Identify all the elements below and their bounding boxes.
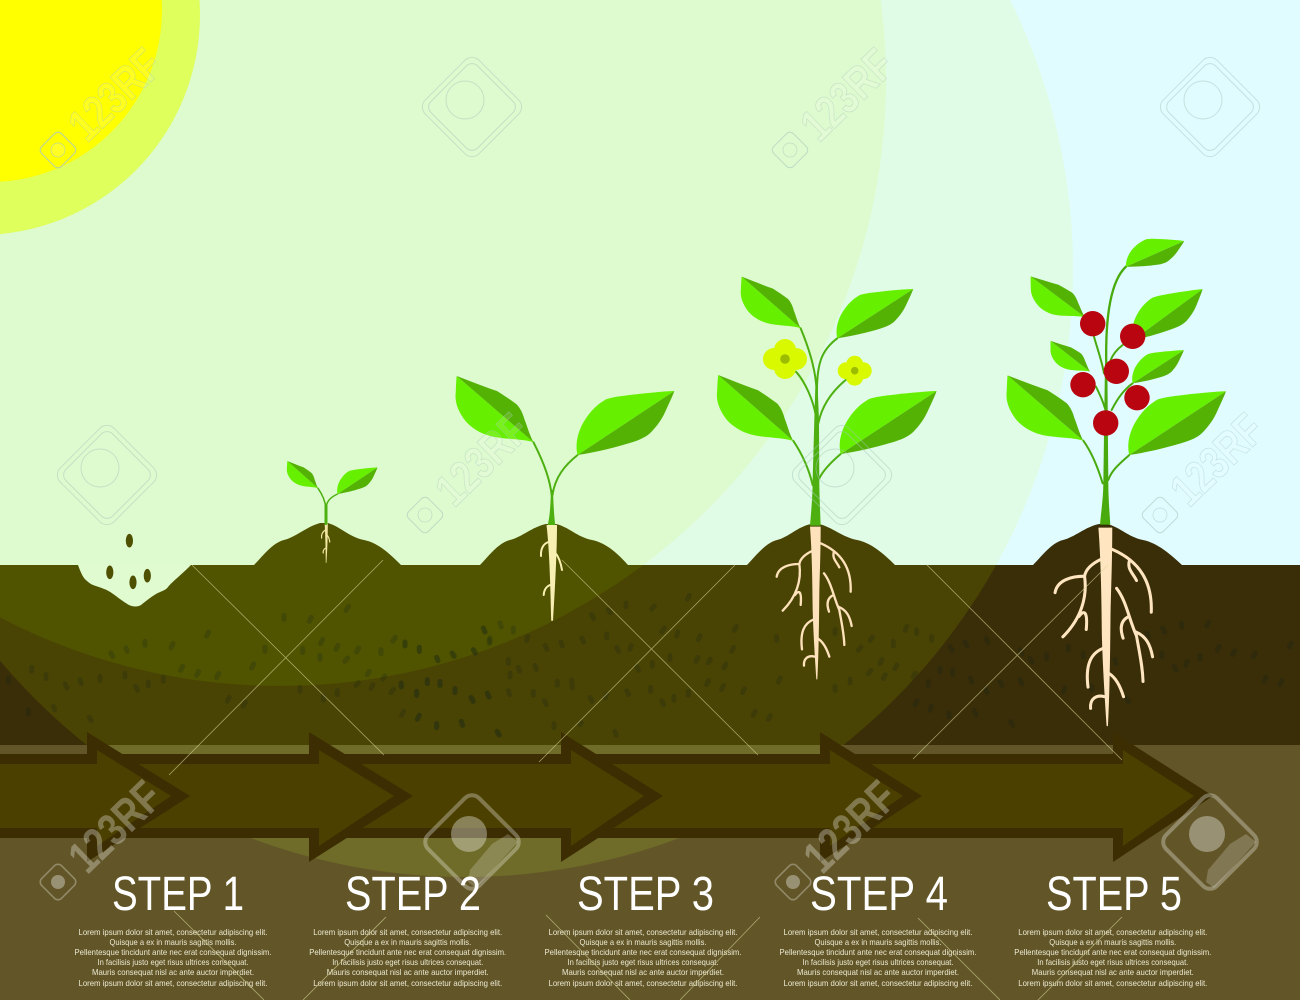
egg watermark bottom centre — [421, 791, 523, 893]
step 2: seedling — [254, 456, 401, 565]
step 4 body text — [780, 927, 976, 988]
step 4 body text: In facilisis justo eget risus ultrices consequat. — [802, 957, 954, 967]
sun — [0, 0, 200, 235]
step 1 body text: Pellentesque tincidunt ante nec erat consequat dignissim. — [74, 947, 272, 957]
arrow 5 — [0, 732, 1213, 862]
step 2 body text: Pellentesque tincidunt ante nec erat consequat dignissim. — [309, 947, 506, 957]
logo middle centre: 123RF — [425, 403, 539, 516]
step 2 body text: In facilisis justo eget risus ultrices consequat. — [332, 957, 483, 967]
step 4 caption — [780, 868, 976, 988]
step 1 body text: Mauris consequat nisl ac ante auctor imperdiet. — [92, 967, 254, 977]
logo top centre right: 123RF — [790, 38, 904, 151]
step 3 body text: Mauris consequat nisl ac ante auctor imperdiet. — [562, 967, 724, 977]
step 5 body text: Quisque a ex in mauris sagittis mollis. — [1049, 937, 1176, 947]
step 3 body text: Lorem ipsum dolor sit amet, consectetur adipiscing elit. — [548, 978, 738, 988]
logo top left: 123RF — [58, 38, 172, 151]
icon: small flower — [838, 356, 872, 386]
step 5 body text: Pellentesque tincidunt ante nec erat consequat dignissim. — [1014, 947, 1211, 957]
step 4 body text: Mauris consequat nisl ac ante auctor imperdiet. — [797, 967, 959, 977]
watermark: large egg icons — [53, 53, 1264, 893]
logo middle centre — [405, 403, 539, 535]
step 2 heading: STEP 2 — [345, 868, 481, 921]
step 4 body text: Lorem ipsum dolor sit amet, consectetur adipiscing elit. — [784, 978, 972, 988]
step 3 body text: Pellentesque tincidunt ante nec erat consequat dignissim. — [544, 947, 742, 957]
step 2 caption — [309, 868, 506, 988]
fruiting plant roots — [1055, 528, 1153, 726]
red berries — [1070, 311, 1150, 436]
step 5 caption — [1014, 868, 1211, 988]
step 5 body text: In facilisis justo eget risus ultrices consequat. — [1037, 957, 1188, 967]
soil layers — [0, 565, 1300, 1000]
step 3 body text: Lorem ipsum dolor sit amet, consectetur adipiscing elit. — [548, 927, 738, 937]
step 4 body text: Lorem ipsum dolor sit amet, consectetur adipiscing elit. — [784, 927, 972, 937]
arrow 1 — [0, 732, 190, 862]
icon: large flower — [763, 339, 807, 379]
step 3: young plant — [438, 363, 687, 621]
logo bottom centre right: 123RF — [793, 770, 907, 883]
fruiting plant stems — [1083, 267, 1133, 525]
egg watermark middle right — [788, 421, 896, 529]
step 5 body text: Lorem ipsum dolor sit amet, consectetur adipiscing elit. — [1018, 978, 1207, 988]
logo bottom left — [38, 770, 172, 902]
young plant root — [541, 525, 562, 621]
step 5 heading: STEP 5 — [1046, 868, 1182, 921]
logo top left — [38, 38, 172, 170]
step 1: seed hole — [78, 534, 191, 606]
step 1 body text: Quisque a ex in mauris sagittis mollis. — [110, 937, 236, 947]
step 3 body text: Quisque a ex in mauris sagittis mollis. — [580, 937, 706, 947]
egg watermark bottom right — [1159, 791, 1261, 893]
logo bottom left: 123RF — [58, 770, 172, 883]
logo bottom centre right — [773, 770, 907, 902]
step 3 caption — [544, 868, 742, 988]
step 5 body text: Mauris consequat nisl ac ante auctor imperdiet. — [1032, 967, 1194, 977]
young plant stem — [534, 442, 578, 525]
flowering plant roots — [777, 527, 852, 679]
step 1 body text: Lorem ipsum dolor sit amet, consectetur adipiscing elit. — [78, 927, 268, 937]
soil specks — [8, 595, 1291, 735]
step 1 heading: STEP 1 — [112, 868, 244, 921]
step 3 heading: STEP 3 — [577, 868, 714, 921]
step 1 caption — [74, 868, 272, 988]
step 1 body text: Lorem ipsum dolor sit amet, consectetur adipiscing elit. — [78, 978, 268, 988]
egg watermark middle left — [53, 421, 161, 529]
step 2 body text: Mauris consequat nisl ac ante auctor imperdiet. — [327, 967, 489, 977]
arrow 2 — [0, 732, 413, 862]
step 4: flowering plant — [699, 266, 949, 679]
step 2 body text — [309, 927, 506, 988]
step 2 body text: Lorem ipsum dolor sit amet, consectetur adipiscing elit. — [313, 978, 502, 988]
arrow 3 — [0, 732, 663, 862]
egg watermark top right — [1156, 53, 1264, 161]
logo top centre right — [770, 38, 904, 170]
step 1 body text: In facilisis justo eget risus ultrices consequat. — [98, 957, 248, 967]
logo middle right: 123RF — [1160, 403, 1274, 516]
step 4 heading: STEP 4 — [810, 868, 948, 921]
step 4 body text: Quisque a ex in mauris sagittis mollis. — [814, 937, 942, 947]
step 1 body text — [74, 927, 272, 988]
flowering plant leaves — [699, 266, 949, 472]
step 2 body text: Quisque a ex in mauris sagittis mollis. — [344, 937, 471, 947]
step 5 body text — [1014, 927, 1211, 988]
seedling stem — [318, 488, 338, 524]
flowering plant stems — [793, 328, 846, 526]
seedling root — [322, 523, 330, 563]
arrow 4 — [0, 732, 922, 862]
seedling leaves — [280, 456, 383, 502]
step 4 body text: Pellentesque tincidunt ante nec erat consequat dignissim. — [780, 947, 976, 957]
young plant leaves — [438, 363, 687, 473]
egg watermark top centre — [418, 53, 526, 161]
step 5 body text: Lorem ipsum dolor sit amet, consectetur adipiscing elit. — [1018, 927, 1207, 937]
icon: seeds — [106, 534, 151, 589]
step 5: fruiting plant — [989, 225, 1238, 726]
step 2 body text: Lorem ipsum dolor sit amet, consectetur adipiscing elit. — [313, 927, 502, 937]
fruiting plant leaves — [989, 225, 1238, 473]
step 3 body text: In facilisis justo eget risus ultrices consequat. — [568, 957, 718, 967]
step 3 body text — [544, 927, 742, 988]
process arrows — [0, 732, 1213, 862]
logo middle right — [1140, 403, 1274, 535]
